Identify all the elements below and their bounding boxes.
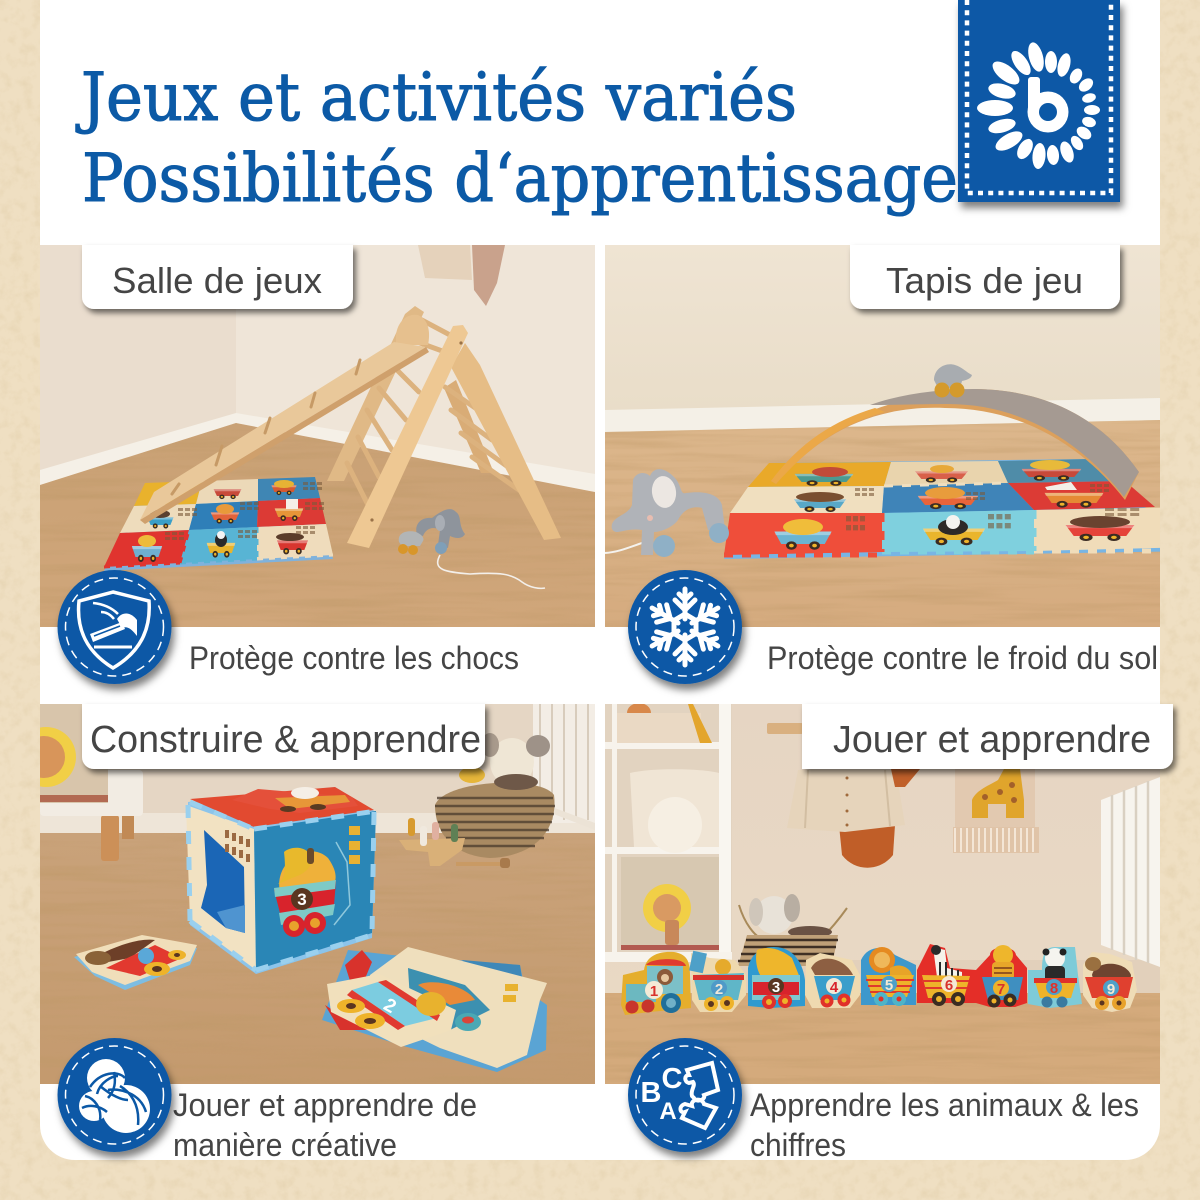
foam mat [104, 477, 333, 571]
tile 6: zebra [917, 944, 976, 1006]
icon: snowflake [628, 570, 742, 684]
label: Construire & apprendre: Construire & apprendre [90, 719, 481, 761]
wall hook and clothes [767, 723, 920, 868]
icon: shield and hammer [58, 570, 172, 684]
label: Salle de jeux [82, 245, 353, 309]
caption: shocks: Protège contre les chocs [189, 640, 519, 676]
caption: creative learning: manière créative [173, 1127, 397, 1163]
tile 2: bear [689, 951, 746, 1012]
foam mat [724, 459, 1195, 559]
tile 1: engine: 1 [650, 983, 658, 1000]
photo: playroom with climbing triangle [40, 245, 595, 627]
tile 3: elephant: 3 [772, 979, 780, 996]
label: Salle de jeux: Salle de jeux [112, 260, 322, 301]
photo: cube built from mat tiles [16, 704, 595, 1084]
tile 3: elephant [748, 947, 805, 1009]
number train [621, 944, 1137, 1015]
curved balance board [771, 389, 1139, 500]
big wooden elephant pull toy [605, 469, 729, 557]
wooden pounding toy [399, 818, 510, 868]
small elephant on wheels on board [934, 364, 972, 398]
title [75, 59, 958, 217]
tile 6: zebra: 6 [945, 977, 953, 994]
icon: letters and puzzle pieces: B [641, 1077, 661, 1109]
tile 7: tiger: 7 [997, 981, 1005, 998]
caption: animals and numbers: chiffres [750, 1127, 846, 1163]
caption: creative learning: Jouer et apprendre de [173, 1087, 477, 1123]
photo: balance board on play mat [605, 245, 1195, 627]
white shelf with bins [605, 703, 732, 962]
caption: animals and numbers [750, 1087, 1139, 1163]
tile 9: horse [1083, 952, 1137, 1012]
tile 7: tiger [976, 945, 1027, 1008]
label: Jouer et apprendre: Jouer et apprendre [833, 719, 1151, 761]
brand logo tag [958, 0, 1120, 202]
side table and poster [40, 704, 143, 861]
tile 2: bear: 2 [715, 981, 723, 998]
foam cube [186, 787, 376, 974]
crib and woven basket [435, 704, 595, 858]
icon: letters and puzzle pieces [628, 1038, 742, 1152]
plush elephant in basket [738, 894, 847, 966]
title: Possibilités d‘apprentissage [82, 140, 958, 217]
stack of mat tiles [322, 947, 547, 1072]
icon: letters and puzzle pieces: A [659, 1098, 677, 1125]
tile 5: lion [861, 947, 916, 1006]
tile 8: panda: 8 [1050, 980, 1058, 997]
label: Tapis de jeu: Tapis de jeu [886, 260, 1083, 301]
caption: creative learning [173, 1087, 477, 1163]
tile 4: rhino [805, 953, 860, 1008]
icon: letters and puzzle pieces: C [662, 1063, 683, 1095]
caption: animals and numbers: Apprendre les animaux & les [750, 1087, 1139, 1123]
crib [1101, 777, 1160, 967]
giraffe wall hanging [953, 769, 1039, 853]
tile 4: rhino: 4 [830, 979, 839, 996]
caption: cold floor: Protège contre le froid du sol [767, 640, 1158, 676]
label: Construire & apprendre [82, 704, 485, 769]
stack of mat tiles: 2 [380, 994, 400, 1018]
loose bear piece [74, 935, 197, 990]
photo: number train on the floor [605, 703, 1160, 1084]
tile 8: panda [1028, 947, 1082, 1008]
hanging clothes [418, 245, 505, 306]
tile 1: engine [621, 952, 691, 1015]
tile 5: lion: 5 [885, 977, 893, 994]
label: Tapis de jeu [850, 245, 1120, 309]
pull-along elephant toys [398, 509, 545, 588]
tile 9: horse: 9 [1107, 981, 1115, 998]
label: Jouer et apprendre [802, 704, 1173, 769]
title: Jeux et activités variés [75, 59, 797, 136]
icon: rolling balls [58, 1038, 172, 1152]
foam cube: 3 [297, 890, 307, 909]
wooden climbing triangle [140, 306, 561, 548]
